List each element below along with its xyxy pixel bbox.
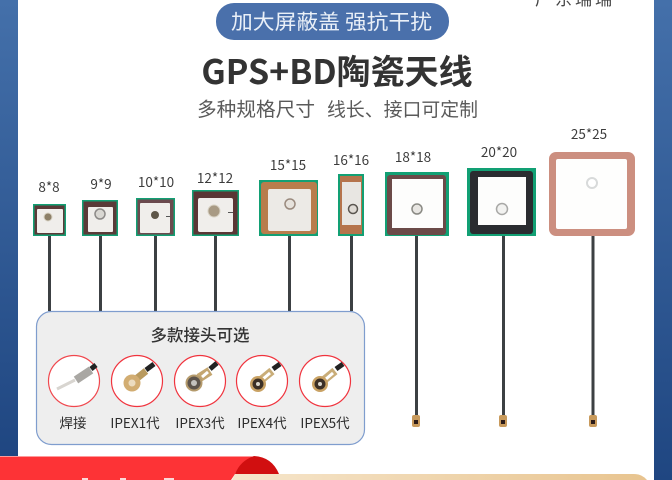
headline pill: 加大屏蔽盖 强抗干扰 <box>231 5 432 35</box>
antenna 15*15 <box>259 154 318 311</box>
connector: IPEX5 <box>300 356 350 432</box>
headline pill <box>216 3 449 40</box>
connector: solder: 焊接 <box>60 412 86 432</box>
bottom red banner <box>0 456 254 480</box>
connector: IPEX4 <box>236 356 288 432</box>
antenna 16*16 <box>333 149 369 311</box>
antenna 9*9 <box>82 173 118 311</box>
connector: IPEX4: IPEX4代 <box>237 412 287 432</box>
subtitle <box>197 93 478 122</box>
panel: connector options <box>36 312 364 444</box>
antenna 25*25: 25*25 <box>571 123 607 143</box>
antenna 8*8: 8*8 <box>38 176 60 196</box>
antenna 12*12: 12*12 <box>197 167 233 187</box>
subtitle: 线长、接口可定制 <box>327 95 478 122</box>
connector: IPEX1: IPEX1代 <box>110 412 160 432</box>
antenna 10*10: 10*10 <box>138 171 174 191</box>
connector <box>499 415 507 427</box>
connector: IPEX3 <box>174 356 226 432</box>
antenna 20*20: 20*20 <box>481 141 517 161</box>
panel heading: 多款接头可选 <box>150 322 250 346</box>
antenna 8*8 <box>33 176 66 311</box>
connector: IPEX3: IPEX3代 <box>175 412 225 432</box>
connector <box>412 415 420 427</box>
connector: IPEX5: IPEX5代 <box>300 412 350 432</box>
antenna 16*16: 16*16 <box>333 149 369 169</box>
title: GPS+BD陶瓷天线 <box>201 45 473 94</box>
connector: IPEX1 <box>110 356 162 432</box>
right blue side bar <box>654 0 672 480</box>
connector: solder <box>48 356 100 432</box>
antenna 10*10 <box>136 171 175 311</box>
antenna 25*25 <box>549 123 635 427</box>
antenna 20*20 <box>467 141 536 427</box>
antenna 9*9: 9*9 <box>90 173 112 193</box>
subtitle: 多种规格尺寸 <box>197 93 315 122</box>
antenna 18*18 <box>385 146 449 427</box>
left blue side bar <box>0 0 18 456</box>
antenna 12*12 <box>192 167 239 311</box>
antenna 15*15: 15*15 <box>270 154 306 174</box>
connector <box>589 415 597 427</box>
bottom cream banner <box>232 474 647 480</box>
banner dark red tab <box>235 456 279 474</box>
antenna 18*18: 18*18 <box>395 146 431 166</box>
